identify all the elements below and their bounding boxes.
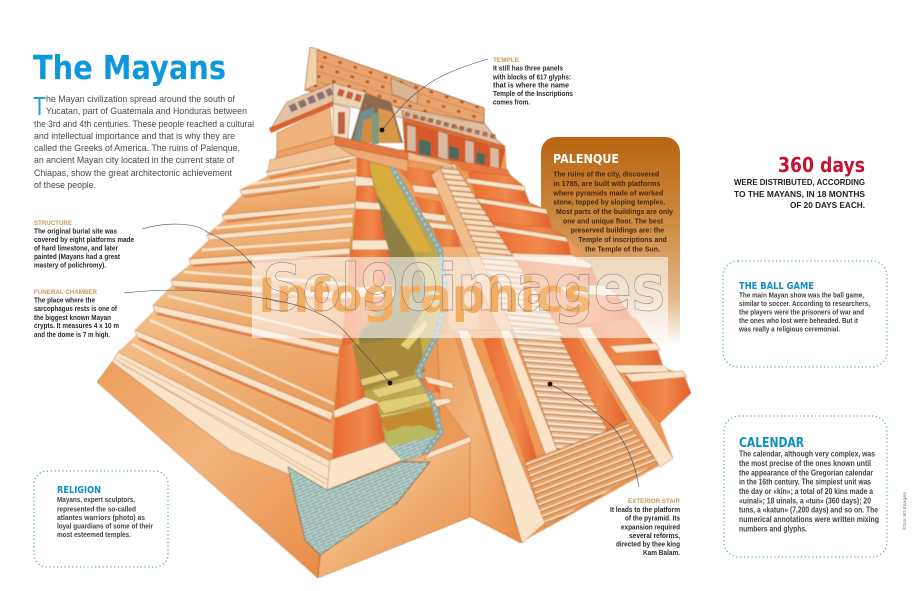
panel: the ball game: the players were the prisoners of war and (739, 310, 864, 317)
annotation: exterior stair: of the pyramid. Its (625, 516, 680, 523)
panel text: Palenque: PALENQUE (553, 151, 619, 166)
panel: religion: Mayans, expert sculptors, (57, 497, 135, 504)
central upper stair (440, 162, 560, 330)
red recess (483, 335, 537, 462)
annotation: funeral chamber: and the dome is 7 m high. (34, 332, 110, 339)
frieze right with glyphs (403, 110, 505, 147)
illustration: Mayan pyramid cutaway (97, 47, 691, 578)
intro text: called the Greeks of America. The ruins of Palenque, (34, 142, 240, 153)
panel: calendar: in the 16th century. The simplest unit was (739, 478, 872, 487)
annotation: funeral chamber (34, 289, 119, 339)
leader line: structure (142, 224, 255, 268)
annotation: temple: Temple of the Inscriptions (493, 91, 573, 98)
lower wall right of the cutaway (437, 330, 522, 543)
panel: religion: RELIGION (57, 485, 101, 496)
panel: calendar: numbers and glyphs. (739, 524, 807, 533)
annotation: exterior stair: directed by thee king (616, 542, 680, 549)
callout: 360 days (734, 153, 865, 210)
panel text: Palenque: where pyramids made of worked (552, 188, 664, 197)
lower front stair structure (458, 327, 673, 543)
panel: religion: represented the so-called (57, 506, 136, 514)
panel text: Palenque: preserved buildings are: the (571, 226, 664, 235)
temple left wall (277, 107, 332, 155)
temple on top of the pyramid (268, 47, 510, 176)
panel text: Palenque: stone, topped by sloping temples. (553, 198, 665, 207)
annotation: exterior stair: It leads to the platform (610, 507, 680, 514)
annotation: funeral chamber: sarcophagus rests is one of (34, 306, 118, 313)
annotation: structure (34, 220, 134, 270)
callout: 360 days: WERE DISTRIBUTED, ACCORDING (734, 177, 865, 187)
annotation: temple: that is where the name (493, 83, 569, 90)
panel: the ball game: similar to soccer. According to researchers, (739, 301, 870, 308)
panel: calendar: the most precise of the ones known until (739, 459, 871, 468)
annotation: temple: comes from. (493, 100, 530, 107)
annotation: exterior stair: Kam Balam. (643, 550, 680, 557)
annotation: structure: STRUCTURE (34, 220, 73, 227)
title: The Mayans (33, 48, 226, 87)
drop cap: T (33, 91, 46, 121)
lower flight (525, 423, 658, 527)
annotation: funeral chamber: FUNERAL CHAMBER (34, 289, 97, 296)
left front wing tiers (395, 165, 480, 332)
annotation: funeral chamber: the biggest known Mayan (34, 315, 111, 322)
annotation: structure: covered by eight platforms made (34, 237, 134, 244)
intro text: and intellectual importance and that is why they are (34, 130, 235, 141)
panel text: Palenque: in 1785, are built with platforms (553, 179, 660, 188)
right cornice (403, 117, 505, 150)
credit: ©Sol 90 Images (901, 491, 907, 530)
annotation: exterior stair: expansion required (621, 524, 680, 531)
annotation: structure: of hard limestone, and later (34, 246, 118, 252)
cream stair border (500, 330, 558, 456)
panel: calendar: numerical annotations were written mixing (739, 515, 879, 524)
intro text: of these people. (34, 179, 96, 190)
panel: religion: most esteemed temples. (57, 532, 131, 539)
annotation: structure: painted (Mayans had a great (34, 254, 121, 261)
annotation: temple: It still has three panels (493, 66, 563, 73)
panel text: Palenque: one and unique floor. The best (563, 216, 663, 225)
annotation: exterior stair (610, 498, 680, 557)
open chamber (350, 93, 403, 143)
panel: calendar: the appearance of the Gregorian calendar (739, 468, 873, 477)
red returns beside the cutaway (327, 153, 402, 490)
roof comb (305, 47, 484, 123)
right recess (560, 337, 627, 430)
intro text: Chiapas, show the great architectonic achievement (34, 167, 232, 178)
panel: religion: loyal guardians of some of their (57, 524, 153, 530)
left balustrade (458, 330, 545, 543)
panel text: Palenque: Most parts of the buildings are only (556, 207, 674, 216)
leader line: exterior stair (548, 382, 639, 487)
panel text: Palenque: the Temple of the Sun. (585, 244, 660, 253)
panel: calendar: The calendar, although very complex, was (739, 450, 876, 459)
cutaway interior (345, 160, 448, 466)
right balustrade (577, 327, 673, 467)
panel: the ball game (723, 261, 887, 367)
right wing tiers (466, 172, 691, 423)
comb central panel (391, 78, 418, 104)
callout: 360 days: OF 20 DAYS EACH. (790, 200, 865, 210)
panel: the ball game: THE BALL GAME (739, 281, 814, 292)
annotation: temple: TEMPLE (493, 57, 520, 64)
panel: calendar: CALENDAR (739, 435, 804, 451)
pyramid base mass (97, 148, 691, 578)
small tier returns at cutaway right (419, 376, 454, 407)
panel: calendar: «uinal»; 18 uinals, a «tun» (360 days); 20 (739, 496, 872, 505)
left cornice (269, 101, 333, 133)
panel: calendar: tuns, a «katun» (7,200 days) and so on. The (739, 506, 879, 515)
watermark: Sol90images (262, 252, 665, 326)
roof frieze left (270, 83, 333, 130)
callout: 360 days: 360 days (778, 153, 865, 177)
panel: religion: atlantes warriors (photo) as (57, 515, 145, 522)
orange panel beside stair (466, 330, 558, 523)
annotation: funeral chamber: crypts. It measures 4 x 10 m (34, 323, 119, 330)
intro text: he Mayan civilization spread around the south of (46, 93, 235, 104)
annotation: temple (492, 57, 573, 107)
upper stair string wall (431, 168, 513, 332)
intro text: Yucatan, part of Guatemala and Honduras between (46, 105, 247, 116)
panel text: Palenque (552, 151, 674, 253)
annotation: structure: The original burial site was (34, 228, 117, 236)
upper flight (513, 330, 608, 452)
temple pillar left (333, 104, 350, 139)
panel text: Palenque: Temple of inscriptions and (578, 235, 667, 244)
annotation: structure: mastery of polichromy). (34, 262, 106, 270)
temple base cornices (335, 136, 408, 160)
callout: 360 days: TO THE MAYANS, IN 18 MONTHS (734, 189, 865, 199)
panel: the ball game: was really a religious ceremonial. (738, 327, 840, 334)
leader line: temple (380, 59, 488, 132)
lower front platform (318, 440, 470, 578)
leader line: funeral chamber (124, 290, 392, 385)
brick core exposed at the base (288, 462, 430, 555)
front wall and columns (403, 122, 505, 170)
intro text: the 3rd and 4th centuries. These people reached a cultural (34, 118, 254, 129)
annotation: exterior stair: several reforms, (629, 533, 680, 540)
left face tiers (97, 148, 358, 578)
comb left end (305, 47, 317, 90)
annotation: temple: with blocks of 617 glyphs: (492, 74, 571, 81)
watermark: Infographics (258, 269, 592, 324)
panel: Palenque background (541, 137, 680, 345)
intro text: an ancient Mayan city located in the current state of (34, 154, 234, 165)
panel text: Palenque: The ruins of the city, discovered (553, 170, 660, 179)
panel: the ball game: The main Mayan show was the ball game, (739, 293, 864, 300)
annotation: exterior stair: EXTERIOR STAIR (628, 498, 680, 505)
intro text (33, 91, 254, 190)
panel: calendar: the day or «kin»; a total of 20 kins made a (739, 487, 874, 496)
roof frieze centre (333, 83, 403, 118)
annotation: funeral chamber: The place where the (34, 298, 95, 304)
interior staircase (358, 320, 435, 426)
panel: religion (34, 471, 168, 567)
panel: calendar (724, 416, 887, 557)
panel: the ball game: the ones who lost were beheaded. But it (739, 318, 859, 325)
